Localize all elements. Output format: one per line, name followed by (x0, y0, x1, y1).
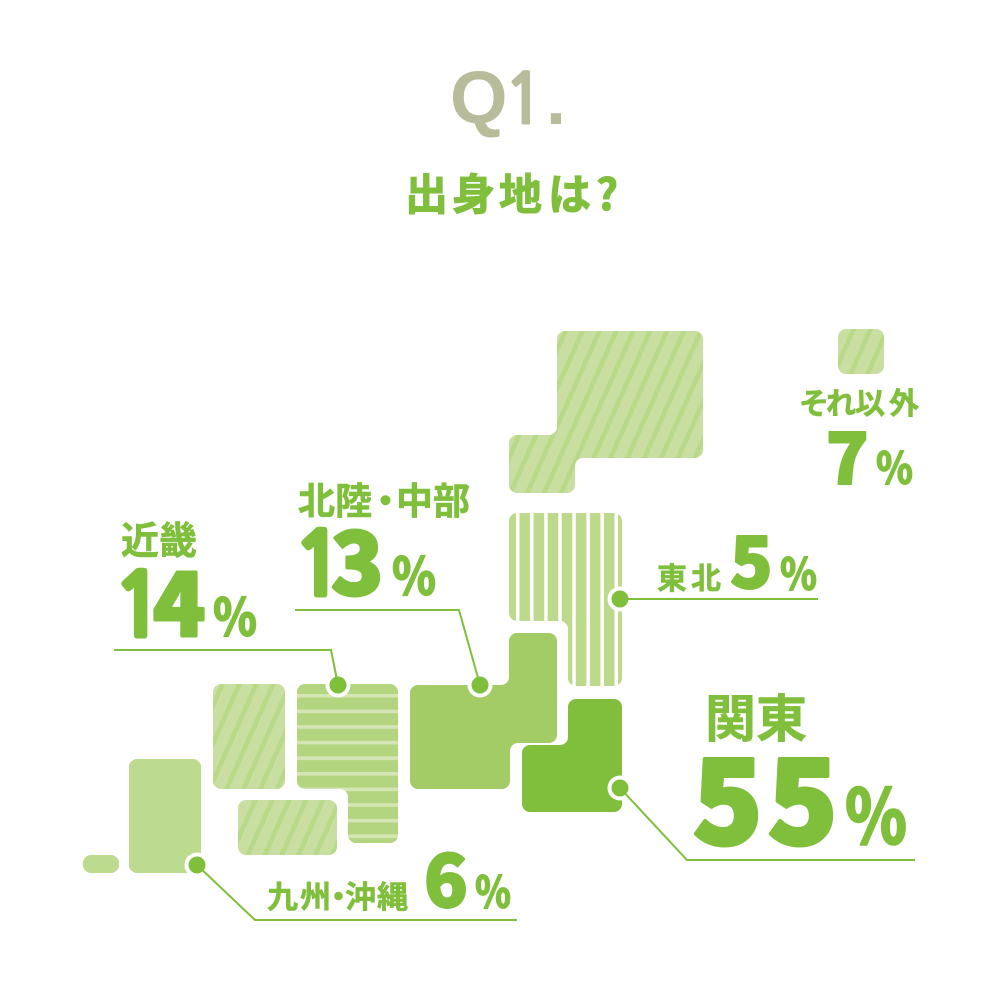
label: Kanto 55%: 関東 (705, 678, 807, 752)
label: other 7%: それ以外 (799, 379, 919, 423)
label: Tohoku 5%: 5 (730, 508, 773, 609)
label: Tohoku 5%: 東北 (657, 554, 721, 598)
label: Kinki 14%: 近畿 (121, 510, 197, 565)
heading: Q1. (450, 56, 566, 140)
label: Kanto 55%: % (845, 756, 907, 866)
region: Kyushu (129, 759, 201, 873)
leader line: Kyushu Okinawa (184, 852, 517, 920)
label: Kanto 55% (693, 678, 907, 877)
leader line: Tohoku (608, 586, 818, 612)
label: other 7% (799, 379, 919, 505)
region: Okinawa (83, 855, 119, 873)
label: Kinki 14%: 1 (112, 563, 165, 650)
heading: Q1.: 1 (503, 66, 545, 135)
label: other 7%: % (876, 433, 913, 497)
leader line: Kanto (608, 776, 915, 860)
region: Kanto (522, 699, 622, 812)
label: Kyushu Okinawa 6%: 九州・沖縄 (267, 872, 408, 917)
label: Hokuriku Chubu 13%: 北陸・中部 (298, 471, 470, 525)
region: Tohoku (509, 513, 622, 686)
leader line: Hokuriku Chubu (295, 610, 492, 698)
title: question: 出身地は? (405, 161, 618, 223)
label: Kinki 14%: % (213, 576, 257, 651)
heading: Q1.: . (546, 60, 566, 140)
label: Hokuriku Chubu 13%: % (392, 535, 436, 610)
label: Kinki 14% (112, 510, 257, 661)
region: Chugoku (213, 684, 285, 789)
label: other 7%: 7 (826, 404, 869, 505)
label: Hokuriku Chubu 13%: 3 (331, 495, 383, 620)
region: other (838, 329, 884, 374)
label: Kyushu Okinawa 6% (267, 823, 511, 928)
label: Tohoku 5%: % (780, 539, 817, 603)
label: Kyushu Okinawa 6%: % (475, 857, 511, 921)
leader line: Kinki (114, 650, 350, 698)
label: Hokuriku Chubu 13%: 1 (292, 522, 345, 609)
region: Shikoku (238, 800, 337, 855)
region: Kinki (297, 684, 398, 843)
label: Tohoku 5% (657, 508, 817, 609)
label: Hokuriku Chubu 13% (292, 471, 470, 620)
heading: Q1.: Q (450, 56, 508, 139)
region: Chubu (410, 633, 557, 789)
label: Kyushu Okinawa 6%: 6 (424, 823, 468, 928)
label: Kinki 14%: 4 (153, 536, 205, 661)
label: Kanto 55%: 55 (693, 712, 837, 877)
region: Hokkaido (509, 331, 703, 493)
map of Japan (83, 329, 884, 873)
